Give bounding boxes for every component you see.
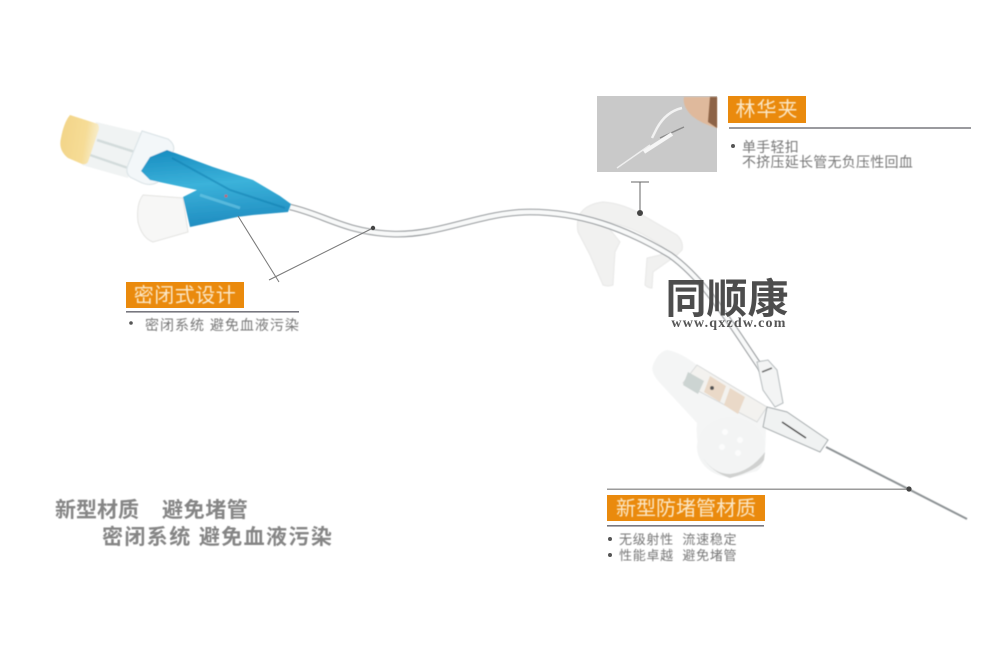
callout: anti-clog material: 新型防堵管材质 xyxy=(616,497,756,520)
wing xyxy=(652,350,767,478)
callout: clamp: 单手轻扣 xyxy=(742,139,799,155)
barrel xyxy=(683,365,767,422)
leader line: needle xyxy=(607,486,912,492)
grip dots xyxy=(719,429,743,456)
callout: closed design xyxy=(126,282,300,333)
blue Y body xyxy=(141,150,291,227)
callout: anti-clog material: 性能卓越 避免堵管 xyxy=(619,548,737,563)
white side cap xyxy=(138,195,188,242)
callout: clamp: 林华夹 xyxy=(736,98,798,121)
leader lines: closed design xyxy=(238,216,375,282)
icon: clamp xyxy=(577,202,682,288)
summary text: 避免堵管 xyxy=(162,499,248,522)
needle xyxy=(826,447,967,519)
heading badge xyxy=(126,282,244,308)
callout: closed design: 密闭系统 避免血液污染 xyxy=(145,317,300,333)
icon: winged needle xyxy=(652,350,828,478)
callout: clamp: 不挤压延长管无负压性回血 xyxy=(742,154,913,170)
heading badge xyxy=(607,495,765,521)
catheter tube xyxy=(290,207,762,370)
callout: clamp xyxy=(728,96,971,170)
summary text: 密闭系统 避免血液污染 xyxy=(102,525,333,549)
icon: closed Y-connector hub xyxy=(60,115,291,242)
summary text: 新型材质 xyxy=(55,498,139,522)
callout: closed design: 密闭式设计 xyxy=(134,284,236,307)
heading badge xyxy=(728,96,806,123)
nose xyxy=(763,407,828,452)
yellow end cap xyxy=(60,115,99,164)
photo: hand on clamp xyxy=(597,96,717,172)
watermark logo: www.qxzdw.com xyxy=(671,316,787,331)
callout: anti-clog material xyxy=(607,495,765,563)
clear collar xyxy=(127,131,174,184)
summary text xyxy=(55,498,333,549)
clear port body xyxy=(82,122,142,178)
watermark logo: 同顺康 xyxy=(666,276,788,322)
callout: anti-clog material: 无级射性 流速稳定 xyxy=(619,532,737,547)
side port xyxy=(757,360,783,407)
leader line: clamp xyxy=(631,182,649,216)
